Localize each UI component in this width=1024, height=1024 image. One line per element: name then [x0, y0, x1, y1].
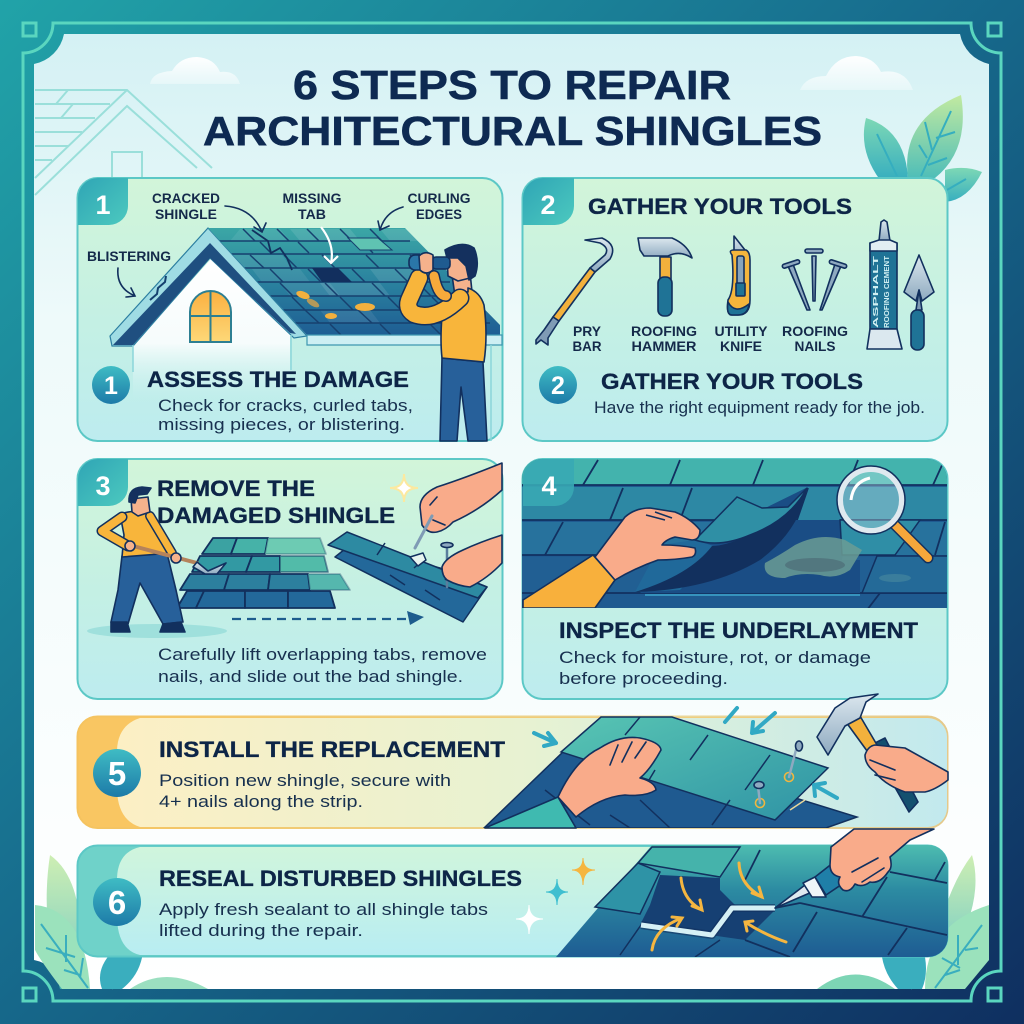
fascia — [307, 335, 502, 345]
heading: DAMAGED SHINGLE — [157, 503, 395, 528]
description — [559, 648, 871, 688]
badge tab 1 — [78, 178, 128, 225]
panel body — [117, 718, 947, 827]
heading: ASSESS THE DAMAGE — [147, 367, 409, 392]
arrow: missing — [321, 227, 338, 263]
icon: pry bar — [536, 238, 613, 345]
detached shingle strip — [328, 532, 487, 622]
arrow: cracked — [225, 206, 266, 232]
tool labels: ROOFING — [631, 324, 697, 339]
person with pry bar — [102, 487, 226, 632]
ground shadow — [87, 624, 227, 638]
badge tab 4: 4 — [541, 471, 557, 501]
heading: INSPECT THE UNDERLAYMENT — [559, 618, 919, 643]
heading bottom: GATHER YOUR TOOLS — [601, 369, 863, 394]
panel: step 3 remove the damaged shingle — [78, 459, 502, 699]
panel body — [117, 847, 947, 955]
description: Check for moisture, rot, or damage — [559, 648, 871, 667]
tool labels: NAILS — [794, 339, 836, 354]
sparkle — [390, 474, 418, 502]
badge tab 3: 3 — [95, 471, 111, 501]
panel: step 6 reseal disturbed shingles — [78, 829, 950, 957]
tool labels — [572, 324, 848, 354]
icon: utility knife — [728, 236, 750, 315]
label: missing tab: MISSING — [282, 191, 342, 206]
description — [159, 771, 451, 811]
description: missing pieces, or blistering. — [158, 415, 405, 434]
label: missing tab: TAB — [298, 207, 326, 222]
sleeve — [523, 555, 615, 608]
number circle 5: 5 — [108, 755, 126, 792]
icon: asphalt roofing cement tube — [867, 220, 902, 349]
leaves bottom right — [817, 855, 989, 989]
panel: step 4 inspect the underlayment — [520, 457, 962, 699]
moisture stain — [765, 537, 862, 578]
description: Check for cracks, curled tabs, — [158, 396, 413, 415]
badge tab 1: 1 — [95, 190, 111, 220]
description: before proceeding. — [559, 669, 728, 688]
number circle 5 — [93, 749, 141, 797]
lifted shingle — [636, 541, 713, 592]
leaves top right — [864, 95, 982, 202]
leaves bottom left — [35, 855, 208, 989]
icon: roofing hammer — [638, 238, 692, 316]
background house outline — [35, 90, 212, 195]
label: missing tab — [282, 191, 342, 222]
description — [158, 645, 487, 686]
dashed arrow — [232, 611, 424, 625]
person with binoculars — [408, 244, 487, 441]
hand — [595, 508, 700, 580]
badge tab 3 — [78, 459, 128, 506]
yellow arrows — [652, 863, 786, 950]
panel: step 1 assess the damage — [78, 178, 505, 441]
tool labels: KNIFE — [720, 339, 762, 354]
shingle field — [177, 538, 350, 608]
heading: RESEAL DISTURBED SHINGLES — [159, 866, 522, 891]
description: lifted during the repair. — [159, 921, 363, 940]
label: cracked shingle — [152, 191, 220, 222]
roof illustration — [484, 717, 857, 828]
house wall — [133, 258, 290, 400]
replacement arrows — [534, 708, 837, 798]
badge tab 4 — [523, 459, 574, 506]
sealant illustration — [556, 845, 950, 957]
number circle 6 — [93, 878, 141, 926]
sparkles — [516, 858, 595, 934]
tool labels: UTILITY — [714, 324, 768, 339]
heading: INSTALL THE REPLACEMENT — [159, 737, 506, 762]
tool labels: BAR — [572, 339, 602, 354]
description: Have the right equipment ready for the job. — [594, 398, 925, 417]
hand with tool — [415, 463, 502, 548]
title — [203, 62, 822, 154]
tool labels: HAMMER — [632, 339, 697, 354]
label: blistering: BLISTERING — [87, 249, 171, 264]
heading top: GATHER YOUR TOOLS — [588, 194, 852, 219]
description: Carefully lift overlapping tabs, remove — [158, 645, 487, 664]
underlayment hole — [640, 487, 860, 593]
label: curling edges — [408, 191, 470, 222]
arrow: curling — [378, 207, 403, 230]
roof close-up illustration — [520, 457, 962, 610]
window — [190, 291, 231, 342]
label: curling edges: EDGES — [416, 207, 462, 222]
number circle 2 — [539, 366, 577, 404]
description: 4+ nails along the strip. — [159, 792, 363, 811]
nails — [754, 741, 802, 808]
sealant bead — [641, 908, 775, 935]
number circle 1 — [92, 366, 130, 404]
gable trim — [110, 228, 307, 346]
number circle 6: 6 — [108, 884, 126, 921]
description: Apply fresh sealant to all shingle tabs — [159, 900, 488, 919]
hammer in hand — [817, 694, 948, 812]
badge tab 2 — [523, 178, 574, 225]
label: cracked shingle: CRACKED — [152, 191, 220, 206]
badge tab 2: 2 — [540, 190, 556, 220]
hand pressing shingle — [485, 737, 661, 828]
description — [158, 396, 413, 434]
icon: trowel — [904, 255, 934, 350]
tool labels: ROOFING — [782, 324, 848, 339]
panel: step 2 gather your tools — [522, 178, 948, 441]
description: Position new shingle, secure with — [159, 771, 451, 790]
panel: step 5 install the replacement — [78, 694, 948, 828]
title: 6 STEPS TO REPAIR — [293, 62, 731, 108]
label: curling edges: CURLING — [408, 191, 470, 206]
icon: asphalt roofing cement tube: ASPHALT — [873, 254, 880, 328]
heading: REMOVE THE — [157, 476, 315, 501]
description: nails, and slide out the bad shingle. — [158, 667, 463, 686]
cloud left — [150, 57, 240, 84]
magnifying glass — [837, 466, 928, 558]
number circle 1: 1 — [104, 372, 118, 400]
title: ARCHITECTURAL SHINGLES — [203, 108, 822, 154]
icon: asphalt roofing cement tube: ROOFING CEMENT — [884, 255, 891, 328]
roof with shingles — [200, 225, 505, 337]
tool labels: PRY — [573, 324, 601, 339]
icon: roofing nails — [782, 249, 847, 310]
heading — [157, 476, 395, 528]
number circle 2: 2 — [551, 372, 565, 400]
cloud right — [800, 56, 913, 90]
arrow: blistering — [118, 268, 135, 297]
sealant tube in hand — [775, 829, 934, 908]
label: cracked shingle: SHINGLE — [155, 207, 217, 222]
hand with nail — [441, 535, 502, 587]
description — [159, 900, 488, 940]
